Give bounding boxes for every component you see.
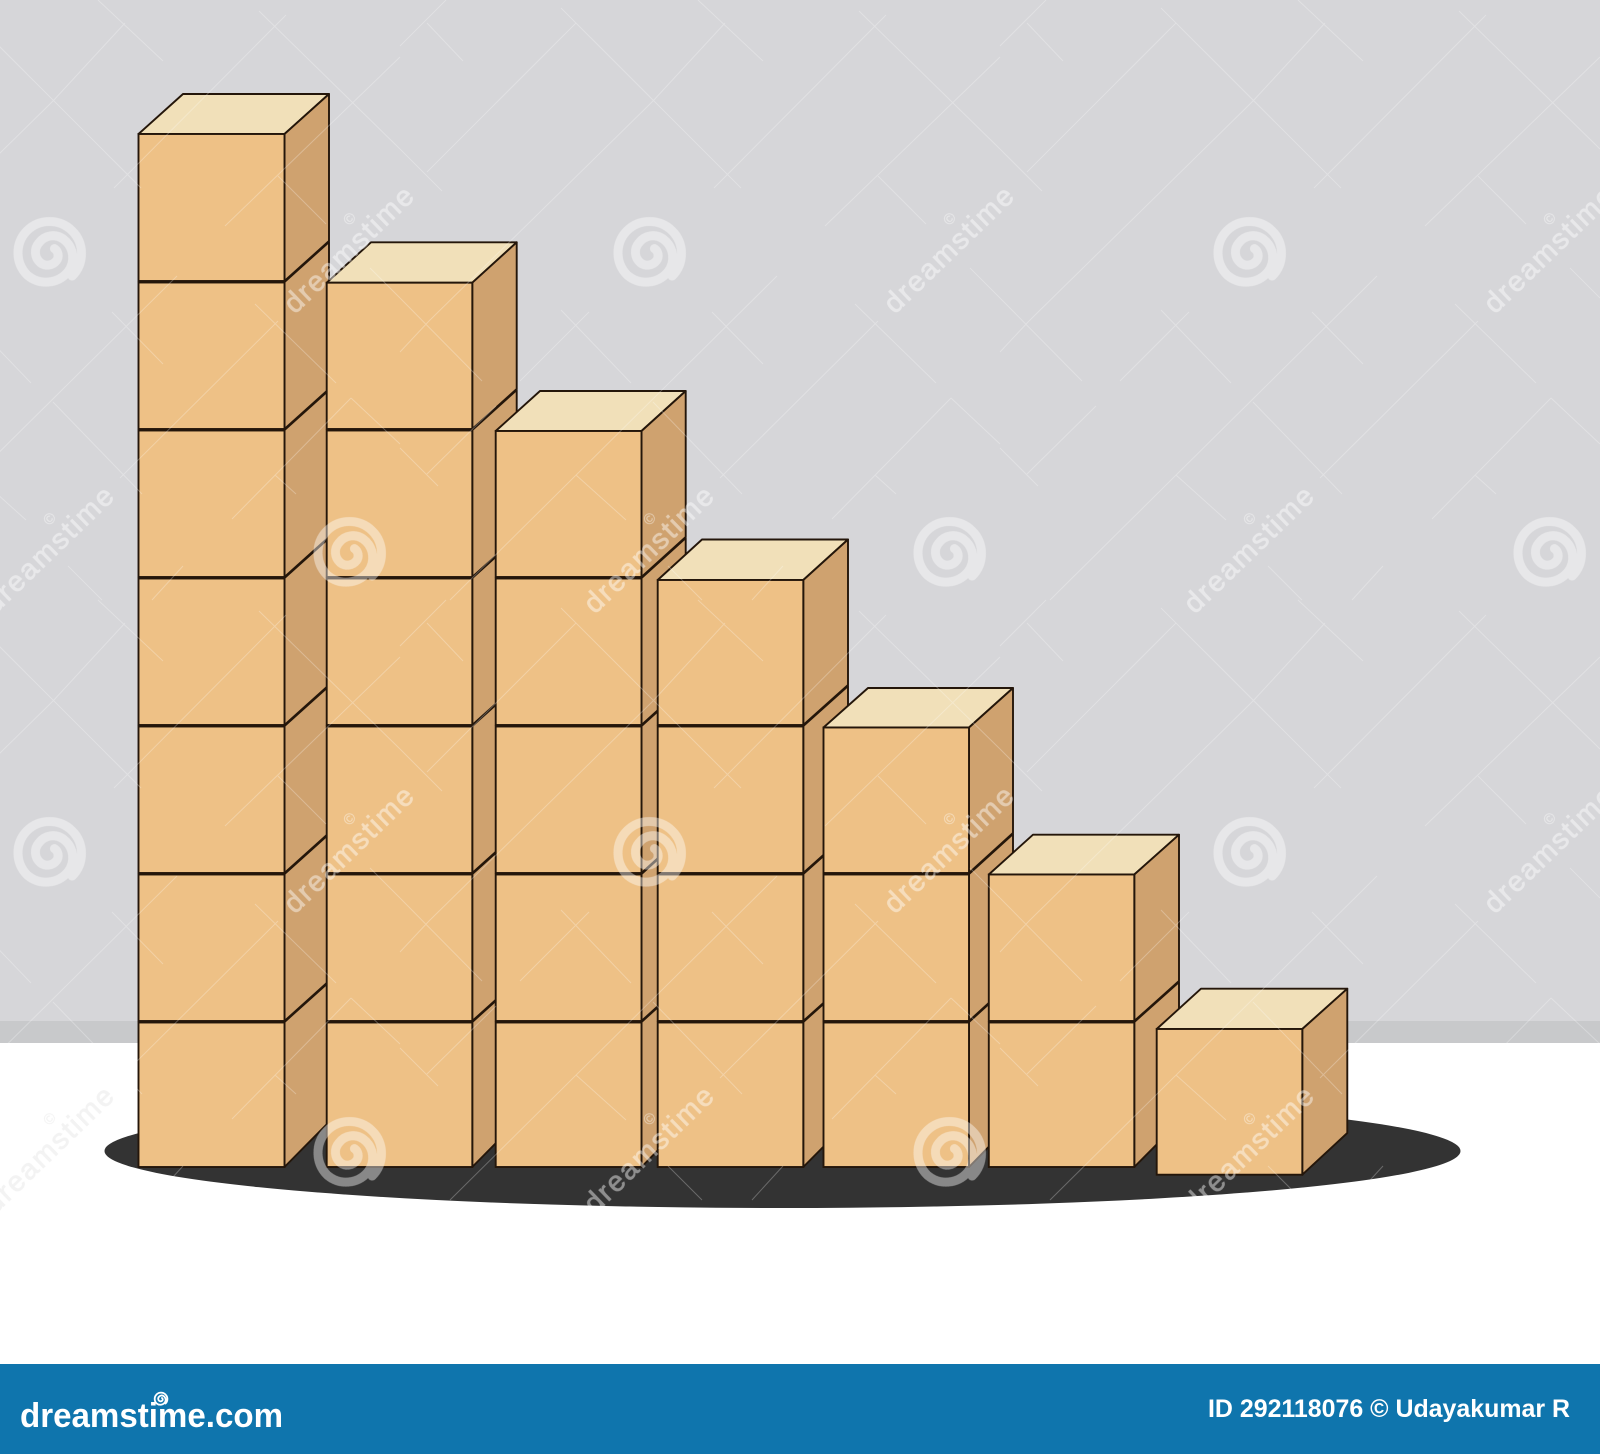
skirting band xyxy=(0,1021,1600,1043)
column 1: seven boxes xyxy=(138,94,329,1167)
watermark text xyxy=(0,170,1600,1220)
watermark text: dreamstime xyxy=(877,180,1021,320)
watermark text: © xyxy=(1240,509,1260,529)
watermark text: © xyxy=(640,1109,660,1129)
watermark text: dreamstime xyxy=(277,180,421,320)
watermark text: © xyxy=(40,1109,60,1129)
watermark text: © xyxy=(640,509,660,529)
watermark text: © xyxy=(1540,209,1560,229)
floor xyxy=(0,1043,1600,1364)
watermark text: © xyxy=(940,809,960,829)
watermark text: dreamstime xyxy=(277,780,421,920)
watermark text: © xyxy=(1540,809,1560,829)
column 7: single box xyxy=(1157,989,1347,1175)
column 6: two boxes xyxy=(989,835,1179,1167)
column 5: three boxes xyxy=(824,688,1013,1167)
image id and credit: ID 292118076 © Udayakumar R xyxy=(1208,1395,1570,1423)
watermark text: © xyxy=(40,509,60,529)
background wall xyxy=(0,0,1600,1021)
watermark spirals xyxy=(5,208,1595,1198)
ground shadow ellipse xyxy=(104,1094,1460,1208)
watermark text: © xyxy=(340,809,360,829)
column 4: four boxes xyxy=(658,540,848,1167)
column 2: six boxes xyxy=(327,242,517,1167)
watermark text: dreamstime xyxy=(577,480,721,620)
watermark text: dreamstime xyxy=(877,780,1021,920)
watermark text: dreamstime xyxy=(1177,1080,1321,1220)
watermark text: © xyxy=(940,209,960,229)
watermark text: © xyxy=(1240,1109,1260,1129)
watermark text: dreamstime xyxy=(577,1080,721,1220)
footer logo mark xyxy=(152,1390,170,1408)
footer bar xyxy=(0,1364,1600,1454)
footer logo text: dreamstime.com xyxy=(20,1397,283,1435)
column 3: five boxes xyxy=(496,391,686,1167)
watermark text: © xyxy=(340,209,360,229)
watermark text: dreamstime xyxy=(1177,480,1321,620)
